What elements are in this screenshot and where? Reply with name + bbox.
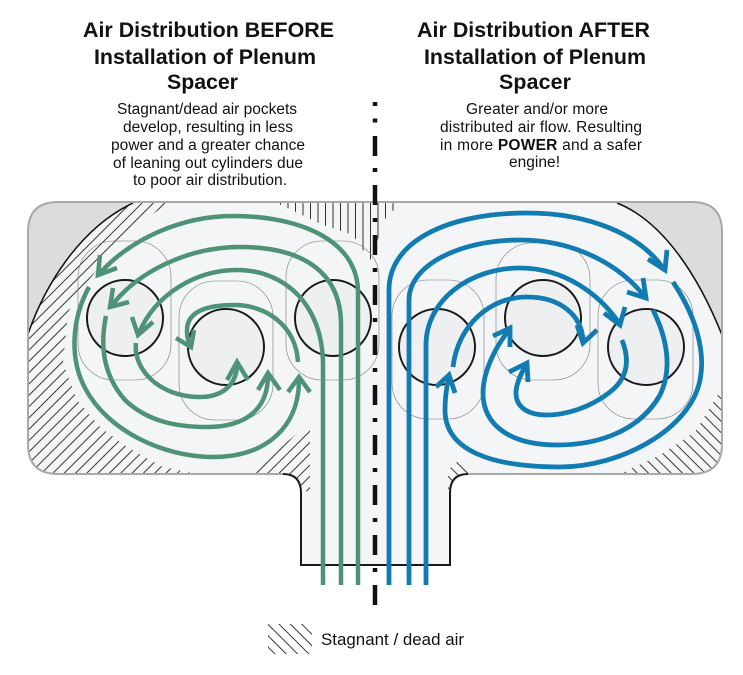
title: before <box>83 18 334 94</box>
title: after: Air Distribution AFTER <box>417 18 651 42</box>
legend <box>268 624 464 654</box>
description: after: Greater and/or more <box>466 101 608 118</box>
green air flow: before <box>74 216 358 585</box>
runner outlines <box>78 241 693 420</box>
description: before: develop, resulting in less <box>123 119 293 136</box>
plenum body <box>20 195 730 565</box>
legend: Stagnant / dead air <box>321 630 464 649</box>
title: after <box>417 18 651 94</box>
title: before: Installation of Plenum <box>94 45 316 69</box>
blue air flow: after <box>389 213 702 585</box>
description: after: in more POWER and a safer <box>440 137 642 154</box>
title: before: Air Distribution BEFORE <box>83 18 334 42</box>
description: before <box>111 101 305 189</box>
description: after: engine! <box>509 154 560 171</box>
description: before: power and a greater chance <box>111 137 305 154</box>
description: before: to poor air distribution. <box>133 172 287 189</box>
description: after <box>440 101 642 171</box>
title: before: Spacer <box>167 70 238 94</box>
center dividing line <box>373 102 377 605</box>
title: after: Installation of Plenum <box>424 45 646 69</box>
description: after: distributed air flow. Resulting <box>440 119 642 136</box>
description: before: Stagnant/dead air pockets <box>117 101 297 118</box>
cylinders <box>87 280 684 385</box>
description: before: of leaning out cylinders due <box>113 155 303 172</box>
title: after: Spacer <box>499 70 571 94</box>
